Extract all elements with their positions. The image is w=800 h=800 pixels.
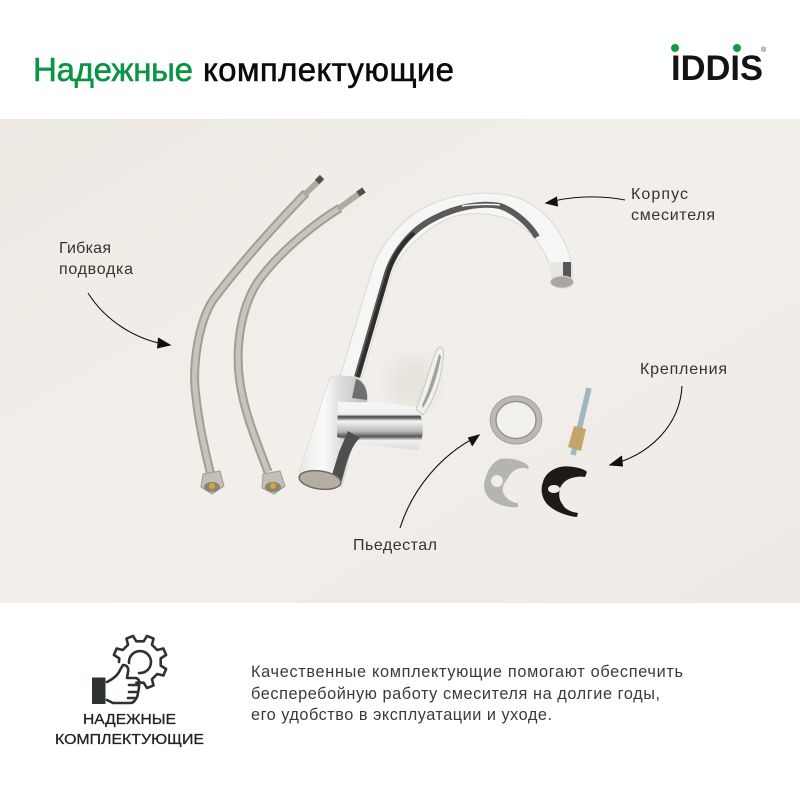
label: faucet body <box>631 186 715 224</box>
description text: его удобство в эксплуатации и уходе. <box>251 706 552 724</box>
icon caption: КОМПЛЕКТУЮЩИЕ <box>55 731 204 748</box>
arrow: flexible hose <box>88 293 170 348</box>
hose: left flexible line <box>195 177 322 494</box>
panel: product photo <box>0 119 800 603</box>
label: faucet body: смесителя <box>631 207 715 224</box>
label: faucet body: Корпус <box>631 186 688 203</box>
logo: IDDIS: ® <box>761 46 767 54</box>
label: flexible hose <box>59 240 133 278</box>
arrow: pedestal <box>400 435 479 528</box>
label: fasteners: Крепления <box>640 361 727 378</box>
faucet: mixer body and spout <box>298 193 574 492</box>
description text: бесперебойную работу смесителя на долгие годы, <box>251 685 660 703</box>
arrow: fasteners <box>610 386 682 466</box>
description text <box>251 663 683 724</box>
icon caption: НАДЕЖНЫЕ <box>83 711 176 728</box>
part: pedestal ring <box>490 396 542 444</box>
description text: Качественные комплектующие помогают обеспечить <box>251 663 683 681</box>
label: flexible hose: подводка <box>59 261 133 278</box>
title: комплектующие <box>203 51 454 88</box>
hose: right flexible line <box>238 190 364 494</box>
logo: IDDIS: IDDIS <box>671 49 763 88</box>
title <box>33 51 454 88</box>
title: Надежные <box>33 51 193 88</box>
part: black washer <box>542 466 587 517</box>
icon caption <box>55 711 204 748</box>
label: pedestal: Пьедестал <box>353 537 437 554</box>
part: threaded stud with brass nut <box>568 388 589 455</box>
label: flexible hose: Гибкая <box>59 240 111 257</box>
arrow: faucet body <box>546 197 625 206</box>
part: silver washer <box>484 458 529 507</box>
icon: thumbs up with gear <box>92 636 166 704</box>
